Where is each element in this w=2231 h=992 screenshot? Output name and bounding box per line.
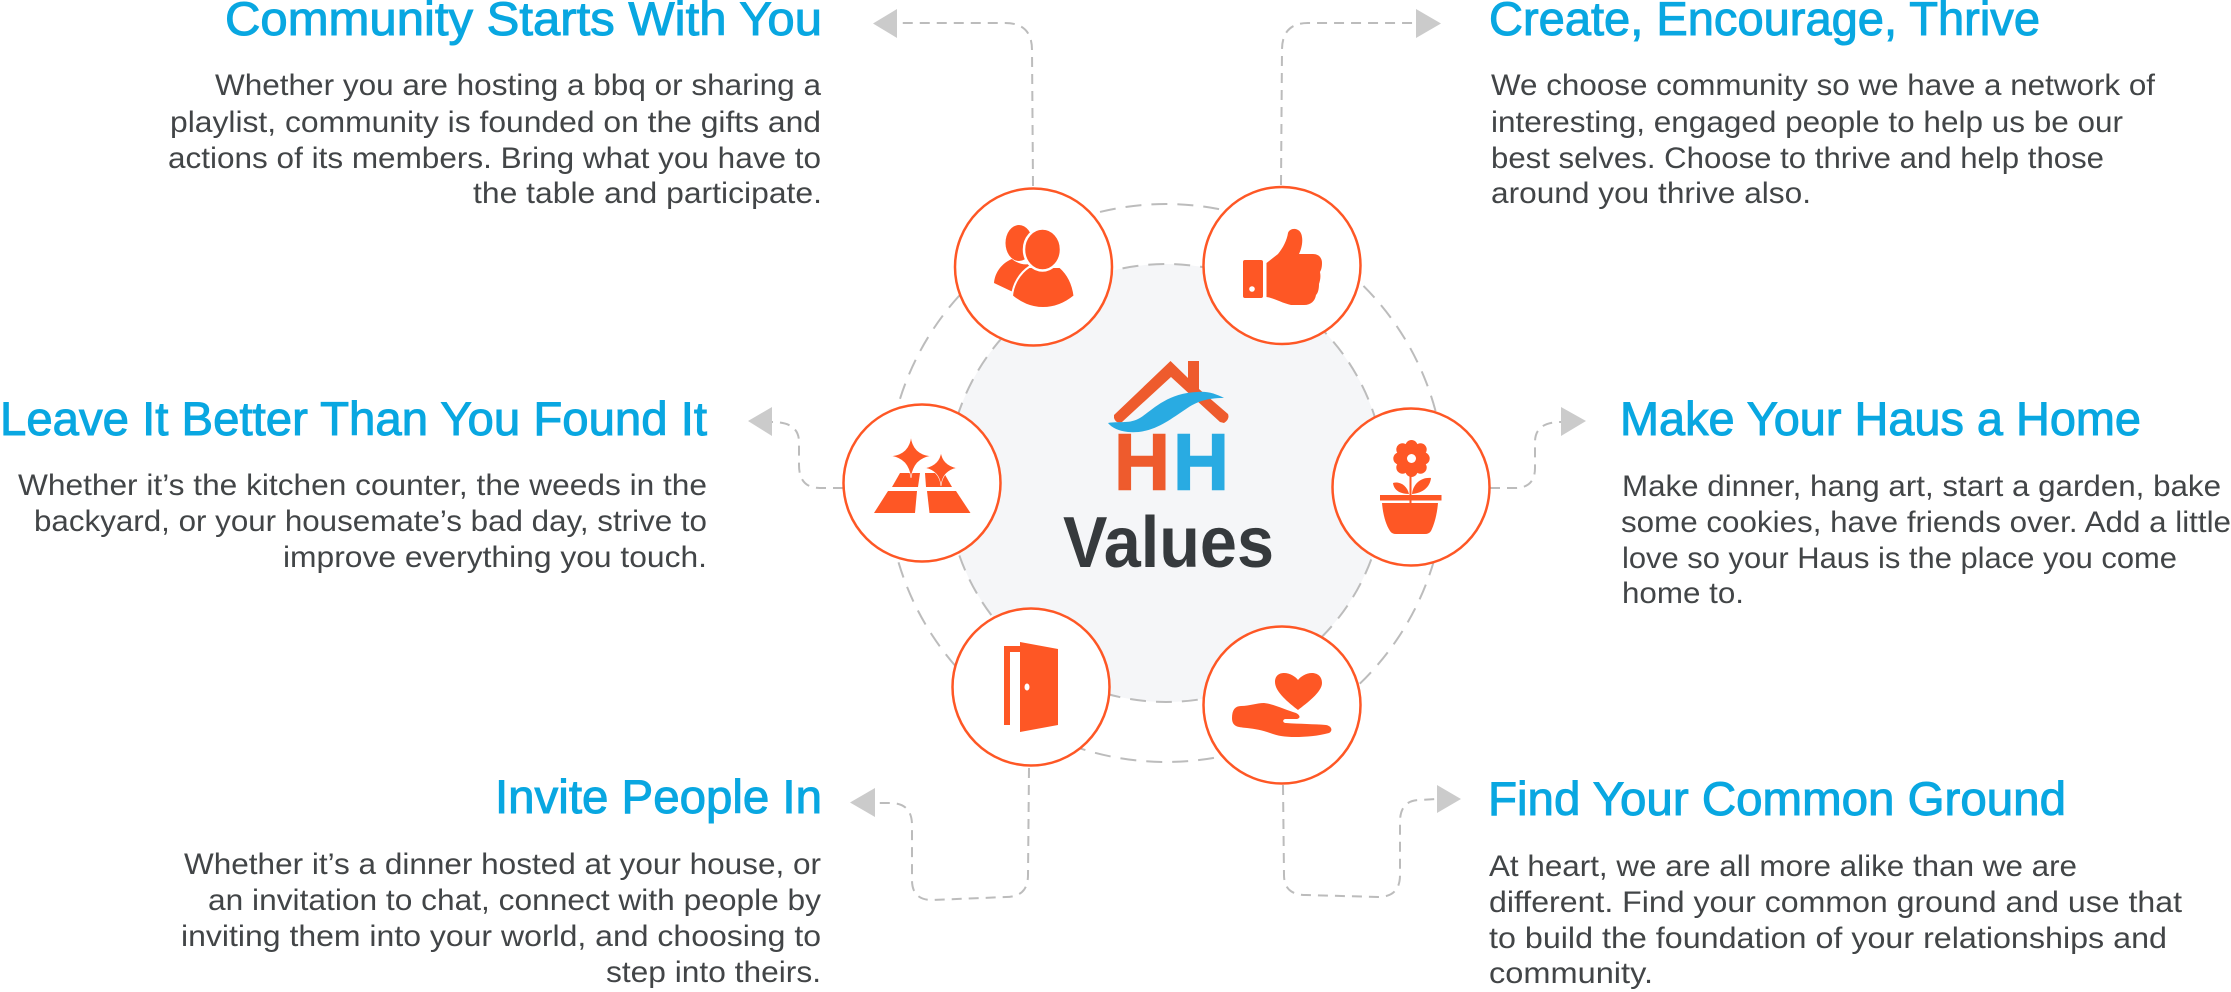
body text: the table and participate. [473,177,822,210]
icon circle: heart in hand [1204,626,1360,784]
arrow: community connector [873,9,1033,186]
body text: Whether it’s a dinner hosted at your house, or [184,848,821,881]
panel: find your common ground [1488,772,2183,990]
panel: leave it better than you found it [0,392,707,574]
body text: love so your Haus is the place you come [1622,542,2177,575]
arrow: common ground connector [1283,785,1461,897]
body text: some cookies, have friends over. Add a little [1621,506,2231,539]
body text: playlist, community is founded on the gifts and [170,106,821,139]
body text: At heart, we are all more alike than we are [1489,850,2077,883]
body text: different. Find your common ground and use that [1489,886,2183,919]
body text: to build the foundation of your relationships and [1489,922,2167,955]
heading: Invite People In [495,770,822,823]
body text: improve everything you touch. [283,541,707,574]
panel: make your haus a home [1620,392,2231,610]
body text: actions of its members. Bring what you have to [168,142,821,175]
body text [1489,850,2183,990]
panel: invite people in [181,770,822,989]
central hub: dashed rings [887,204,1445,762]
body text: around you thrive also. [1491,177,1811,210]
body text [18,469,707,574]
panel: create encourage thrive [1489,0,2156,210]
body text: an invitation to chat, connect with people by [208,884,821,917]
heading: Leave It Better Than You Found It [0,392,707,445]
body text: step into theirs. [606,956,821,989]
body text: best selves. Choose to thrive and help those [1491,142,2104,175]
body text: inviting them into your world, and choosing to [181,920,821,953]
icon: HH house logo [1108,361,1229,506]
body text [1491,69,2156,210]
logo and central title [1063,361,1274,583]
body text [168,69,822,210]
body text: Make dinner, hang art, start a garden, bake [1622,470,2221,503]
body text: interesting, engaged people to help us be our [1491,106,2123,139]
body text [1621,470,2231,610]
panel: community starts with you [168,0,822,210]
body text: Whether it’s the kitchen counter, the weeds in the [18,469,707,502]
icon: HH house logo: H [1173,418,1229,506]
icon: HH house logo: H [1114,418,1170,506]
heading: Make Your Haus a Home [1620,392,2141,445]
icon circle: sparkling floor [844,404,1000,562]
icon circle: flower pot [1332,408,1490,566]
icon circle: people [955,188,1112,346]
body text: home to. [1622,577,1744,610]
body text: backyard, or your housemate’s bad day, strive to [34,505,707,538]
body text [181,848,821,989]
arrow: make your haus connector [1490,407,1586,488]
icon circle: open door [952,608,1110,766]
arrow: leave it better connector [748,407,843,488]
body text: Whether you are hosting a bbq or sharing a [215,69,821,102]
icon circle: thumbs up [1204,187,1360,344]
heading: Values: Values [1063,503,1274,583]
arrow: create connector [1281,9,1441,185]
arrow: invite connector [850,768,1029,900]
body text: community. [1489,957,1653,990]
body text: We choose community so we have a network of [1491,69,2156,102]
heading: Find Your Common Ground [1488,772,2066,825]
